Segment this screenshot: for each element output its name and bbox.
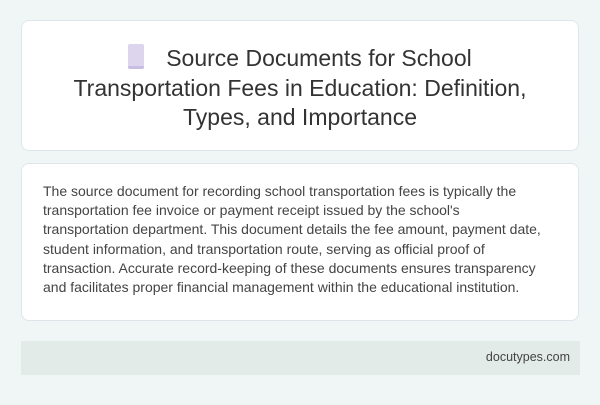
title: Source Documents for School Transportation Fees in Education: Definition, Types, and Importance [73,45,526,130]
title card [21,20,579,151]
footer: docutypes.com [486,350,570,364]
description text: The source document for recording school transportation fees is typically the transportation fee invoice or payment receipt issued by the school's transportation department. This document details the fee amount, payment date, student information, and transportation route, serving as official proof of transaction. Accurate record-keeping of these documents ensures transparency and facilitates proper financial management within the educational institution. [43,183,541,295]
description card [21,163,579,321]
footer [21,341,580,375]
